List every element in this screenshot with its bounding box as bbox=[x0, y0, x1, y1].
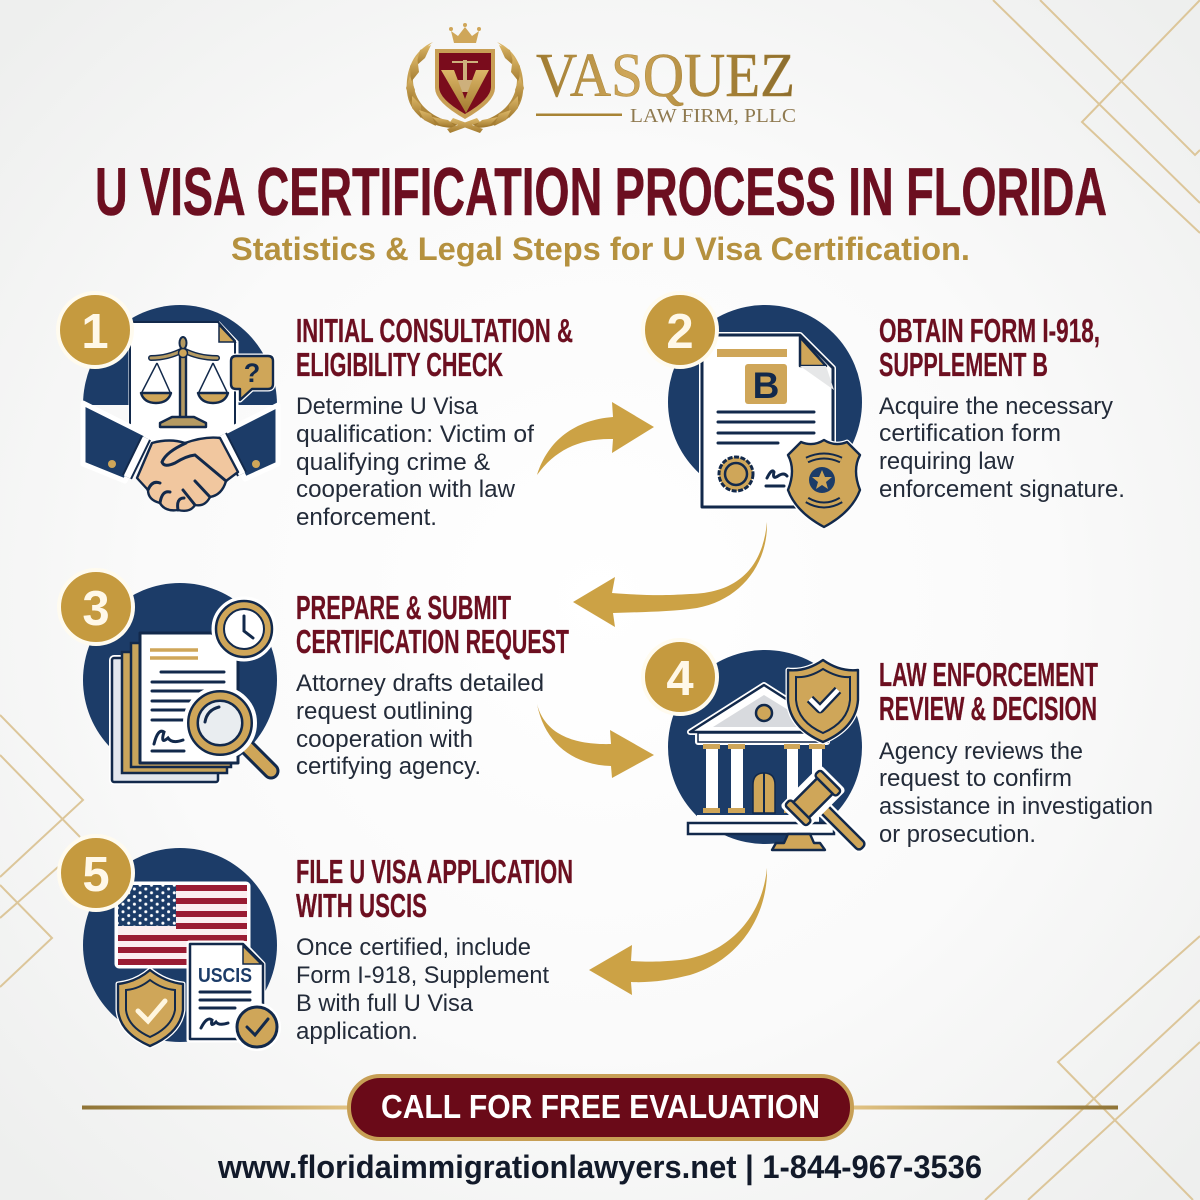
step 2 text: enforcement signature. bbox=[879, 476, 1125, 503]
step 3 heading: CERTIFICATION REQUEST bbox=[296, 623, 569, 660]
arrow: step 3 to 4 bbox=[537, 704, 654, 778]
step 4 text: or prosecution. bbox=[879, 821, 1036, 848]
step 1 heading bbox=[296, 312, 573, 383]
number badge 1: 1 bbox=[81, 305, 109, 359]
icon: courthouse, shield and gavel bbox=[668, 650, 880, 865]
step 1 text bbox=[296, 393, 534, 531]
icon: flag, shield and USCIS document: USCIS bbox=[198, 965, 252, 987]
step 4 heading bbox=[879, 656, 1098, 727]
icon: shield with V bbox=[435, 49, 495, 119]
panel: step 3 bbox=[59, 570, 569, 782]
panel: step 4 bbox=[643, 640, 1153, 865]
step 3 heading: PREPARE & SUBMIT bbox=[296, 589, 511, 626]
step 5 text: Form I-918, Supplement bbox=[296, 962, 549, 989]
contact line: www.floridaimmigrationlawyers.net | 1-844-967-3536 bbox=[217, 1149, 982, 1185]
step 1 heading: INITIAL CONSULTATION & bbox=[296, 312, 573, 349]
logo subline: LAW FIRM, PLLC bbox=[630, 105, 796, 127]
step 1 text: qualification: Victim of bbox=[296, 421, 534, 448]
icon: crown bbox=[449, 23, 481, 43]
icon: consultation handshake: ? bbox=[244, 358, 260, 388]
step 2 heading bbox=[879, 312, 1100, 383]
step 4 text: request to confirm bbox=[879, 765, 1072, 792]
step 2 heading: OBTAIN FORM I-918, bbox=[879, 312, 1100, 349]
icon: form I-918 with police badge: B bbox=[753, 365, 779, 406]
step 2 text: requiring law bbox=[879, 448, 1015, 475]
step 5 heading bbox=[296, 853, 573, 924]
icon: laurel wreath bbox=[406, 42, 524, 133]
number badge 4 bbox=[643, 640, 717, 714]
number badge 5 bbox=[59, 836, 133, 910]
panel: step 1 bbox=[58, 293, 573, 531]
step 3 heading bbox=[296, 589, 569, 660]
step 2 text bbox=[879, 393, 1125, 503]
arrow: step 2 to 3 bbox=[573, 522, 767, 627]
step 3 text: request outlining bbox=[296, 698, 473, 725]
step 1 text: enforcement. bbox=[296, 504, 437, 531]
step 4 text: Agency reviews the bbox=[879, 738, 1083, 765]
step 2 text: certification form bbox=[879, 420, 1061, 447]
icon: form I-918 with police badge bbox=[668, 305, 862, 527]
step 5 heading: WITH USCIS bbox=[296, 887, 427, 924]
step 5 text: B with full U Visa bbox=[296, 990, 474, 1017]
step 2 heading: SUPPLEMENT B bbox=[879, 346, 1048, 383]
step 5 text bbox=[296, 934, 549, 1045]
number badge 2 bbox=[643, 293, 717, 367]
call to action banner bbox=[82, 1076, 1118, 1139]
number badge 3 bbox=[59, 570, 133, 644]
step 2 text: Acquire the necessary bbox=[879, 393, 1113, 420]
icon: documents, clock and magnifier bbox=[83, 583, 277, 782]
logo wordmark: VASQUEZ bbox=[536, 42, 795, 110]
number badge 1 bbox=[58, 293, 132, 367]
icon: consultation handshake bbox=[83, 305, 278, 511]
call to action banner: CALL FOR FREE EVALUATION bbox=[381, 1088, 820, 1125]
step 5 heading: FILE U VISA APPLICATION bbox=[296, 853, 573, 890]
step 1 text: qualifying crime & bbox=[296, 449, 490, 476]
step 3 text: cooperation with bbox=[296, 726, 473, 753]
icon: flag, shield and USCIS document bbox=[83, 848, 278, 1048]
step 4 text bbox=[879, 738, 1153, 848]
step 1 text: Determine U Visa bbox=[296, 393, 479, 420]
step 4 text: assistance in investigation bbox=[879, 793, 1153, 820]
number badge 4: 4 bbox=[666, 652, 694, 706]
arrow: step 4 to 5 bbox=[589, 868, 767, 995]
number badge 5: 5 bbox=[82, 848, 110, 902]
step 5 text: Once certified, include bbox=[296, 934, 531, 961]
panel: step 2 bbox=[643, 293, 1125, 527]
arrow: step 1 to 2 bbox=[537, 402, 654, 475]
step 1 text: cooperation with law bbox=[296, 476, 516, 503]
step 5 text: application. bbox=[296, 1018, 418, 1045]
number badge 3: 3 bbox=[82, 582, 110, 636]
logo: Vasquez Law Firm bbox=[406, 23, 796, 133]
step 3 text: Attorney drafts detailed bbox=[296, 670, 544, 697]
step 3 text bbox=[296, 670, 544, 780]
step 1 heading: ELIGIBILITY CHECK bbox=[296, 346, 503, 383]
subtitle: Statistics & Legal Steps for U Visa Certification. bbox=[231, 231, 970, 267]
panel: step 5 bbox=[59, 836, 573, 1048]
step 3 text: certifying agency. bbox=[296, 753, 481, 780]
number badge 2: 2 bbox=[666, 305, 694, 359]
